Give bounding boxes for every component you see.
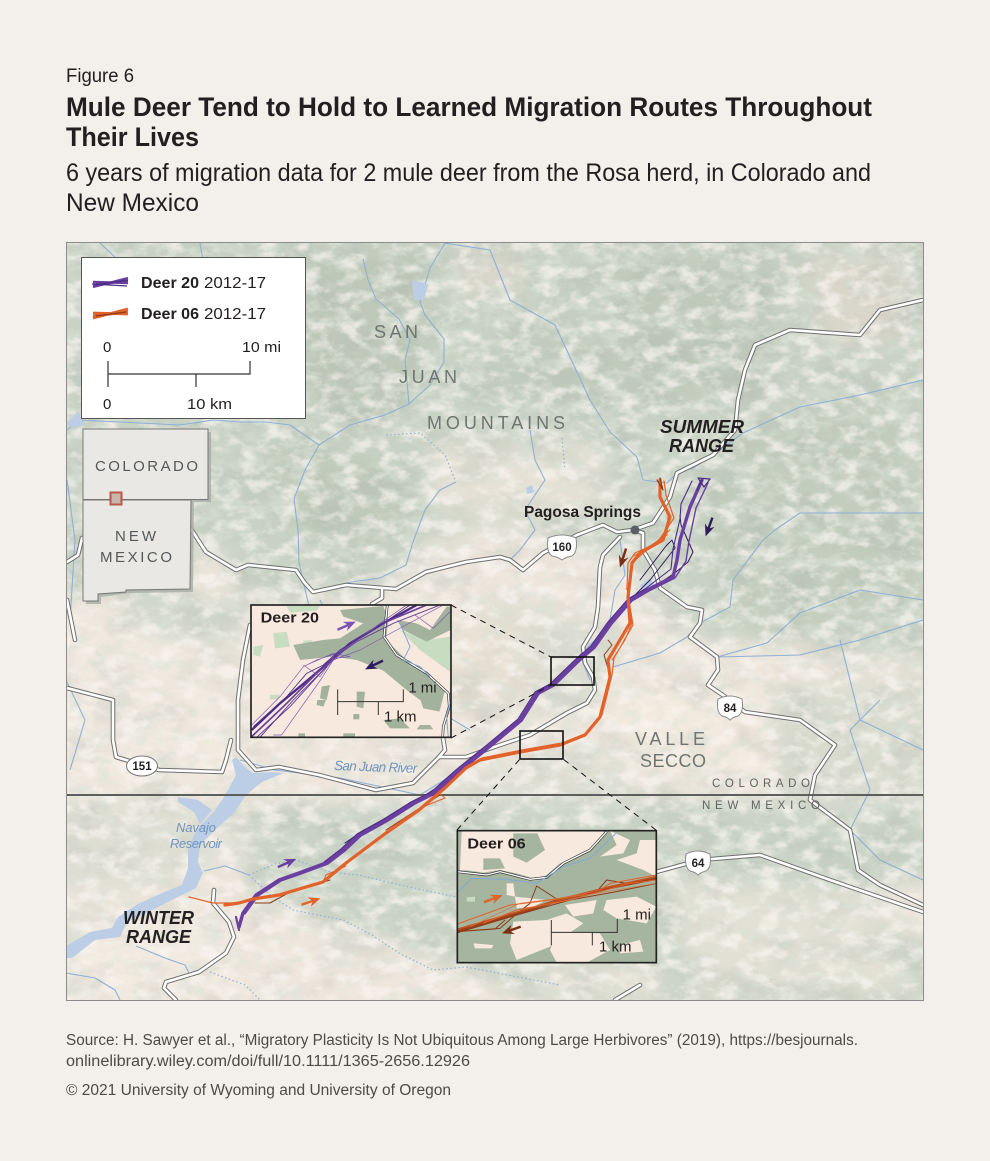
arrow: deer 20 westbound — [701, 516, 717, 538]
winter range label — [123, 908, 194, 947]
roads — [67, 300, 923, 1000]
panel: map — [40, 220, 950, 1010]
arrow: deer 20 eastbound — [276, 854, 298, 872]
subtitle — [66, 159, 871, 217]
source note: onlinelibrary.wiley.com/doi/full/10.1111/1365-2656.12926 — [66, 1053, 470, 1070]
Colorado — [83, 429, 208, 500]
Navajo Reservoir label: Navajo — [176, 820, 216, 835]
scale bar: 0 — [103, 339, 111, 356]
arrow: deer 06 westbound — [615, 547, 631, 569]
winter range label: RANGE — [126, 927, 192, 947]
Valle Secco label: SECCO — [640, 751, 706, 771]
locator map: Colorado and New Mexico — [83, 429, 211, 604]
mountain range label: MOUNTAINS — [427, 413, 565, 433]
Navajo Reservoir label — [170, 820, 223, 851]
inset: Deer 20 — [251, 605, 453, 737]
inset: Deer 06 — [457, 831, 656, 963]
scale bar: 0 — [103, 396, 111, 413]
subtitle: 6 years of migration data for 2 mule deer from the Rosa herd, in Colorado and — [66, 159, 871, 187]
inset: Deer 20: 1 km — [384, 708, 416, 725]
state labels on map — [702, 778, 820, 812]
scale bar — [103, 339, 281, 413]
scale bar: 10 mi — [242, 339, 281, 356]
title — [66, 92, 872, 152]
inset: Deer 20: 1 mi — [408, 679, 437, 696]
legend — [82, 258, 306, 418]
reservoir and lakes — [66, 280, 655, 958]
shield: route 84: 84 — [724, 703, 737, 715]
deer 20 route — [236, 478, 710, 930]
state line — [67, 794, 923, 796]
shield: route 64 — [686, 851, 710, 875]
deer 06 route — [189, 478, 674, 905]
Colorado: COLORADO — [95, 458, 198, 475]
mountain range label: JUAN — [399, 367, 457, 387]
title: Their Lives — [66, 122, 199, 152]
summer range label: SUMMER — [660, 417, 744, 437]
legend key: deer 20: 2012-17 — [204, 275, 266, 292]
mountain range label — [374, 322, 565, 433]
locator boxes and leader lines — [451, 605, 656, 830]
legend key: deer 20: Deer 20 — [141, 275, 199, 292]
shield: route 160: 160 — [552, 542, 572, 554]
shield: route 64: 64 — [692, 858, 705, 870]
summer range label — [660, 417, 744, 456]
shield: route 151: 151 — [132, 761, 152, 773]
Valle Secco label: VALLE — [635, 729, 705, 749]
map border — [66, 242, 924, 1000]
shield: route 160 — [548, 535, 576, 560]
inset: Deer 20: Deer 20 — [261, 610, 319, 627]
scale bar: 10 km — [187, 396, 232, 413]
source note — [66, 1032, 858, 1070]
arrow: deer 06 eastbound — [300, 894, 322, 909]
subtitle: New Mexico — [66, 189, 199, 217]
winter range label: WINTER — [123, 908, 194, 928]
study area marker — [110, 492, 122, 504]
Valle Secco label — [635, 729, 706, 771]
inset: Deer 06: 1 mi — [623, 906, 651, 923]
summer range label: RANGE — [669, 436, 735, 456]
New Mexico: MEXICO — [100, 549, 172, 566]
state labels on map: COLORADO — [712, 778, 810, 790]
rivers and streams — [66, 243, 923, 1000]
legend key: deer 20 — [92, 275, 266, 292]
inset: Deer 06: 1 km — [599, 939, 631, 956]
figure label: Figure 6 — [66, 66, 134, 87]
copyright: © 2021 University of Wyoming and University of Oregon — [66, 1082, 451, 1099]
legend key: deer 06 — [93, 306, 266, 323]
Navajo Reservoir label: Reservoir — [170, 836, 223, 851]
source note: Source: H. Sawyer et al., “Migratory Plasticity Is Not Ubiquitous Among Large Herbivores” (2019), https://besjournals. — [66, 1032, 858, 1049]
Pagosa Springs marker — [524, 504, 641, 534]
New Mexico: NEW — [115, 528, 157, 545]
legend key: deer 06: 2012-17 — [204, 306, 266, 323]
shield: route 151 — [126, 756, 158, 776]
New Mexico — [83, 500, 191, 601]
inset: Deer 06: Deer 06 — [467, 836, 526, 853]
mountain range label: SAN — [374, 322, 418, 342]
state labels on map: NEW MEXICO — [702, 800, 820, 812]
legend key: deer 06: Deer 06 — [141, 306, 199, 323]
Pagosa Springs marker: Pagosa Springs — [524, 504, 641, 521]
map terrain — [40, 220, 950, 1010]
title: Mule Deer Tend to Hold to Learned Migration Routes Throughout — [66, 92, 872, 122]
highway casing — [67, 300, 923, 1000]
shield: route 84 — [718, 696, 742, 720]
San Juan River label: San Juan River — [334, 758, 418, 776]
